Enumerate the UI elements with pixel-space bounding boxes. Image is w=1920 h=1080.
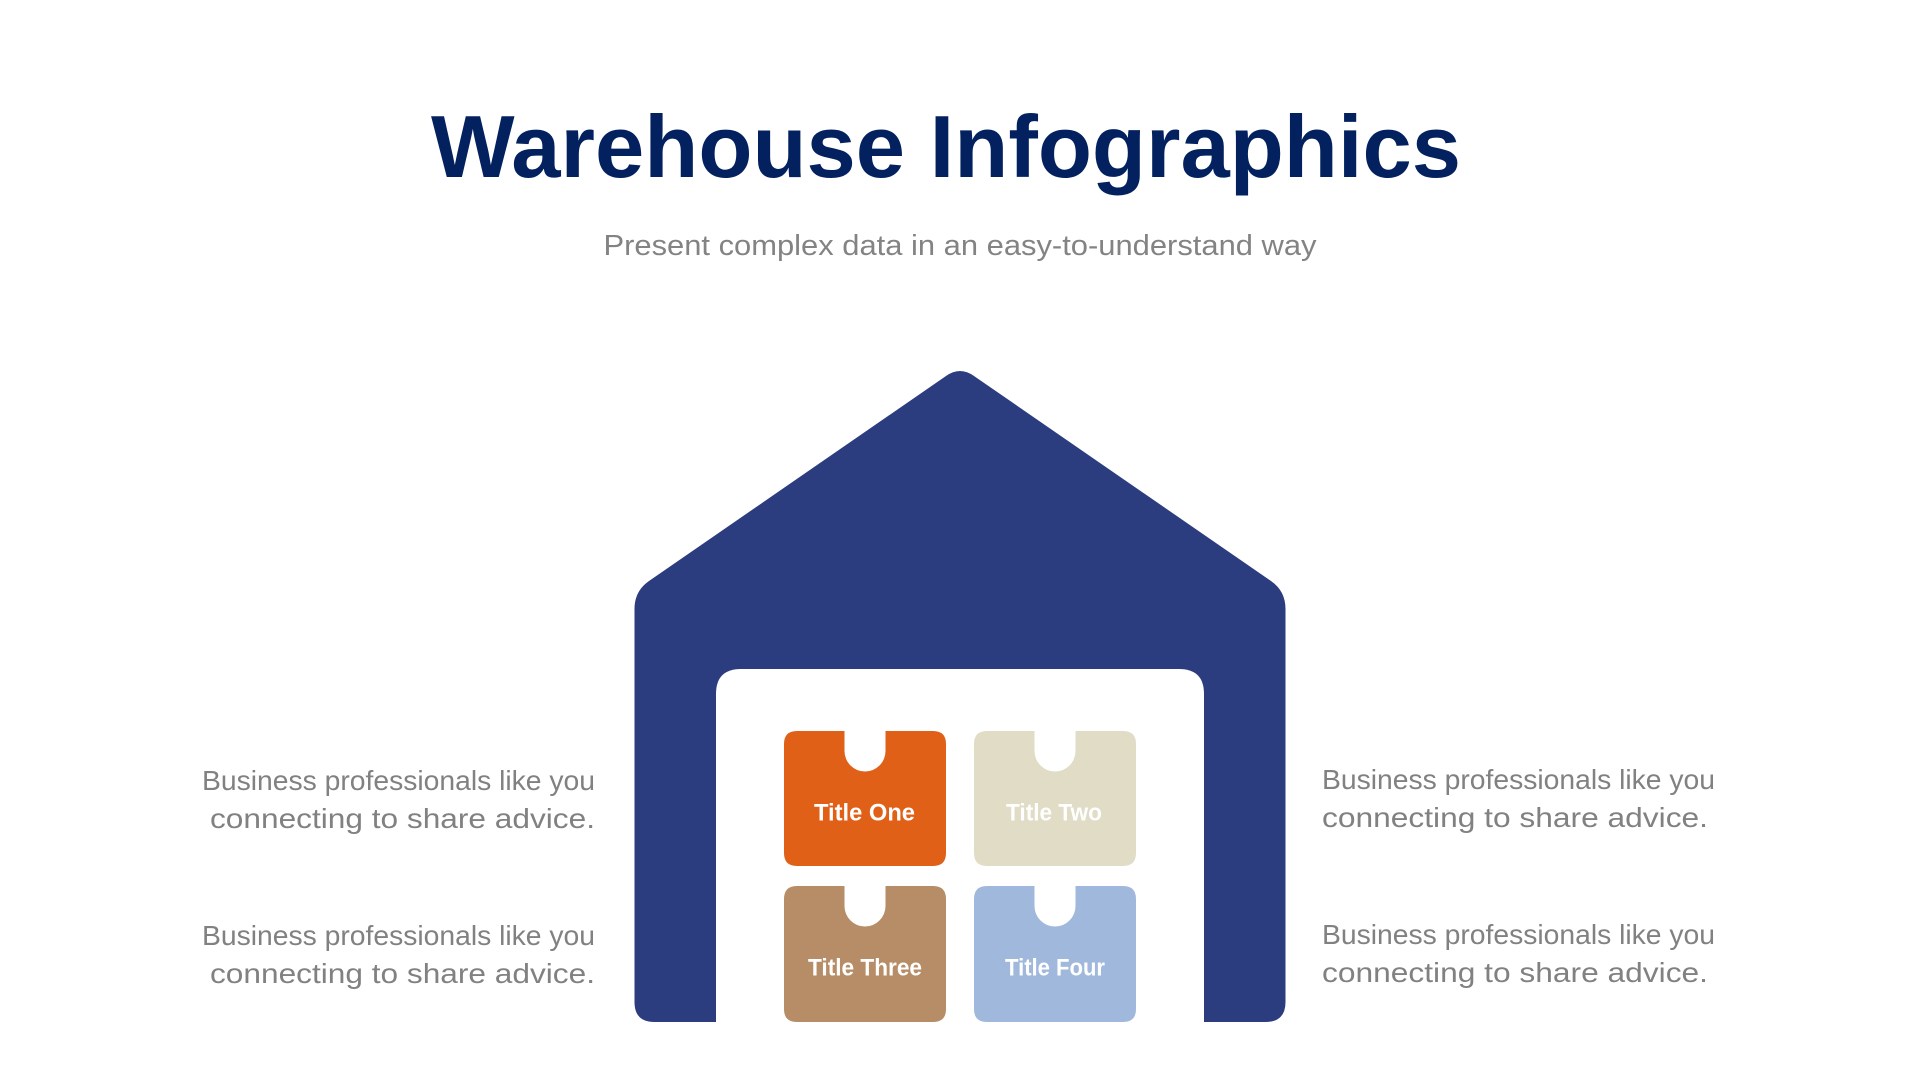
text block: top right: connecting to share advice. [1322,802,1708,833]
text block: top right [1322,764,1715,833]
text block: bottom left: Business professionals like you [202,920,595,951]
text block: bottom left: connecting to share advice. [210,958,595,989]
text block: top left: Business professionals like you [202,765,595,796]
text block: top left [202,765,595,834]
text block: bottom right: connecting to share advice. [1322,957,1708,988]
card: Title Three: Title Three [808,954,922,982]
text block: bottom right: Business professionals like you [1322,919,1715,950]
card: Title Four [974,886,1136,1022]
subtitle: Present complex data in an easy-to-understand way [604,230,1317,262]
card: Title One [784,731,946,866]
title: Warehouse Infographics [431,97,1461,196]
text block: top left: connecting to share advice. [210,803,595,834]
text block: bottom right [1322,919,1715,988]
card: Title Three [784,886,946,1022]
card: Title Two [974,731,1136,866]
card: Title One: Title One [814,800,915,826]
card: Title Four: Title Four [1005,954,1105,982]
warehouse door opening [716,669,1204,1022]
text block: top right: Business professionals like you [1322,764,1715,795]
warehouse building [634,371,1286,1022]
text block: bottom left [202,920,595,989]
card: Title Two: Title Two [1006,800,1102,826]
